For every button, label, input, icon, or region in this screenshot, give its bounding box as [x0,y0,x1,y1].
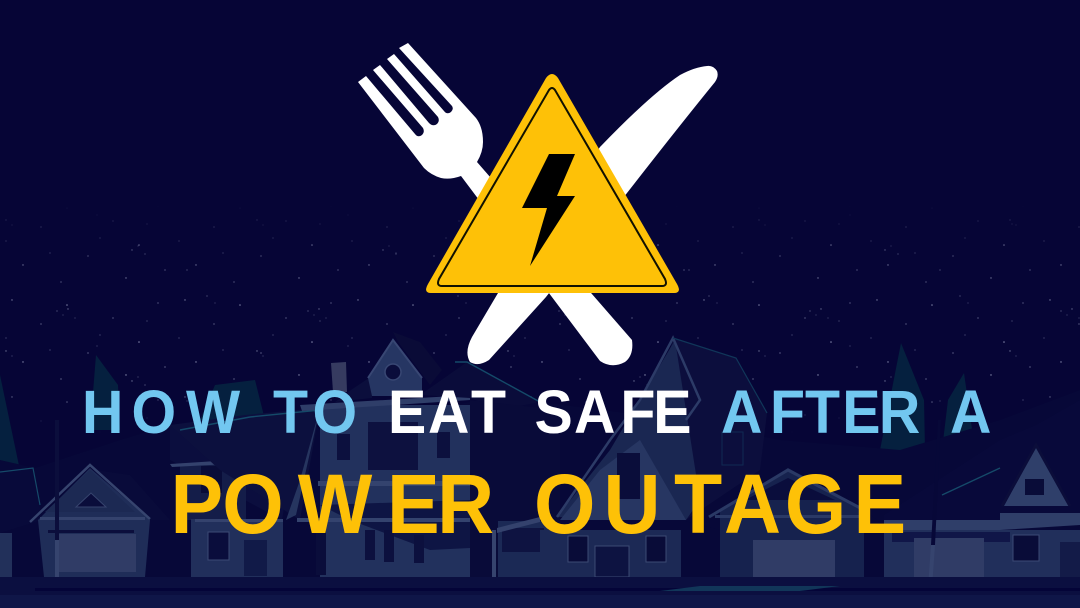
title line 2: OUTAGE [534,458,906,552]
house: far left [0,468,42,577]
house: big central [170,332,540,577]
title line 1: TO [273,377,357,446]
house: right garage [681,468,895,577]
title [82,377,991,552]
dark mass behind houses [0,390,1080,577]
title line 2 [171,458,906,552]
title line 1: AFTER [721,377,920,446]
stars [0,205,1080,435]
title line 1: A [950,377,991,446]
icon: warning triangle with lightning bolt [426,74,679,293]
house: far right [884,400,1080,577]
title line 1: HOW [82,377,240,446]
icon: knife [467,66,718,364]
title line 2: POWER [171,458,494,552]
icon: lightning bolt [522,154,575,266]
icon: fork and knife crossed [358,43,718,365]
neighbourhood illustration [0,332,1080,608]
title line 1: EAT [388,377,506,446]
utility poles [55,420,941,588]
title line 1: SAFE [534,377,692,446]
triangle inner outline [438,88,666,286]
chimney [331,362,347,392]
house: connector [470,400,560,577]
trees [0,343,975,500]
title line 1 [82,377,991,446]
house: A-frame [540,338,767,577]
main roof band [300,395,470,411]
house: left garage [30,465,170,577]
house: small two-storey [170,410,300,577]
icon: fork [358,43,632,365]
street [0,577,1080,608]
triangle body [426,74,679,293]
